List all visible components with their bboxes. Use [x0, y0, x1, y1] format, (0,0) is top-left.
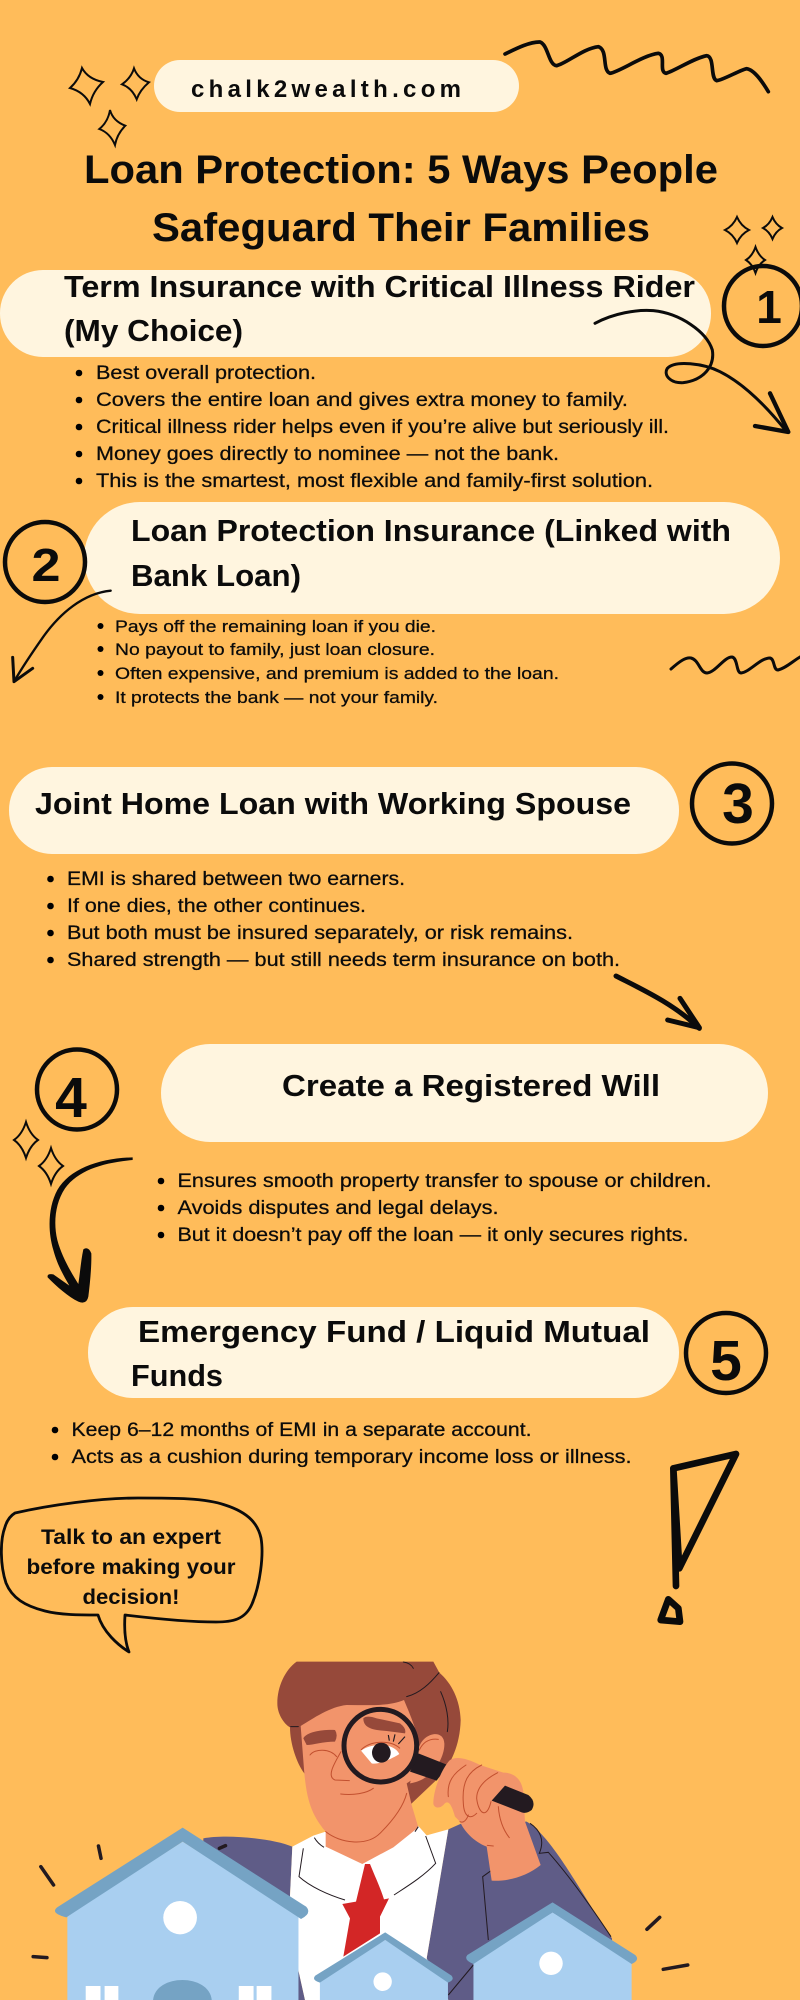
hand finger lines: [448, 1765, 509, 1846]
eyebrow right: [363, 1717, 405, 1733]
decorative squiggle top right: [505, 42, 768, 92]
number badge 5: [686, 1313, 766, 1393]
bullet list 2: No payout to family, just loan closure.: [115, 640, 435, 659]
number badge 3: [692, 764, 772, 844]
heading pill 5: [88, 1307, 679, 1398]
magnifying glass handle: [410, 1753, 448, 1781]
illustration: man with magnifying glass: [203, 1662, 612, 2000]
magnifying glass lens: [344, 1709, 417, 1782]
panel: way 5 emergency fund: [52, 1307, 766, 1468]
arrow: from section 2 down left: [13, 591, 111, 682]
title: Loan Protection: 5 Ways People: [84, 148, 718, 192]
ear: [410, 1734, 444, 1783]
icon: sparkles above number 1: [725, 217, 782, 273]
eye: [361, 1734, 405, 1764]
bullet list 3: But both must be insured separately, or risk remains.: [67, 923, 573, 944]
panel: way 4 registered will: [14, 1044, 768, 1303]
heading 2: [131, 513, 731, 593]
arrow: from section 3: [616, 976, 699, 1028]
bullet list 2: Often expensive, and premium is added to the loan.: [115, 664, 559, 683]
house right: [466, 1902, 637, 2000]
callout: talk to an expert speech bubble: Talk to an expert: [41, 1526, 221, 1549]
heading 4: Create a Registered Will: [282, 1068, 660, 1103]
panel: way 1 term insurance: [0, 266, 800, 492]
number badge 2: 2: [32, 539, 60, 591]
heading 5: Funds: [131, 1358, 223, 1393]
tie: [342, 1864, 389, 1957]
heading pill 3: [9, 767, 679, 854]
arrow: looped arrow from section 1: [595, 310, 788, 432]
number badge 3: 3: [722, 772, 754, 836]
heading 2: Bank Loan): [131, 558, 301, 593]
bullet list 4: But it doesn’t pay off the loan — it only secures rights.: [178, 1225, 688, 1246]
heading 1: (My Choice): [64, 313, 243, 348]
heading pill 2: [84, 502, 780, 614]
house small: [314, 1932, 453, 2000]
closed eye, nose, mouth and jaw lines: [310, 1739, 438, 1842]
decorative squiggle right of section 2: [671, 657, 800, 673]
illustration: houses and burst dashes: [33, 1828, 688, 2000]
shirt: [289, 1826, 448, 2000]
heading pill 1: [0, 270, 711, 357]
hair lines: [291, 1662, 448, 1732]
bullet list 5: Keep 6–12 months of EMI in a separate account.: [72, 1420, 532, 1441]
arrow: thick curved arrow down: [48, 1157, 133, 1303]
number badge 4: 4: [55, 1066, 87, 1130]
eyebrow left: [303, 1730, 337, 1745]
icon: top sparkles: [70, 68, 149, 145]
bullet list 3: If one dies, the other continues.: [67, 896, 366, 917]
bullet list 2: [98, 617, 559, 707]
bullet list 4: Ensures smooth property transfer to spouse or children.: [178, 1171, 712, 1192]
heading 1: Term Insurance with Critical Illness Rider: [64, 269, 695, 304]
callout: talk to an expert speech bubble: decision!: [82, 1586, 180, 1609]
burst dashes: [33, 1846, 688, 1969]
website badge: [154, 60, 519, 112]
number badge 5: 5: [710, 1329, 742, 1393]
number badge 4: [37, 1050, 117, 1130]
bullet list 1: This is the smartest, most flexible and family-first solution.: [96, 471, 653, 492]
panel: way 3 joint home loan: [9, 764, 772, 1028]
house large: [55, 1828, 308, 2000]
number badge 1: 1: [756, 281, 782, 333]
number badge 1: [724, 266, 800, 346]
title: Safeguard Their Families: [152, 206, 650, 250]
icon: sparkles below number 4: [14, 1122, 63, 1184]
bullet list 3: [47, 869, 620, 971]
bullet list 2: It protects the bank — not your family.: [115, 688, 438, 707]
bullet list 1: [76, 363, 669, 492]
bullet list 1: Money goes directly to nominee — not the bank.: [96, 444, 559, 465]
panel: way 2 loan protection insurance: [5, 502, 780, 707]
bullet list 4: [158, 1171, 711, 1246]
bullet list 4: Avoids disputes and legal delays.: [178, 1198, 498, 1219]
magnifying glass grip: [492, 1786, 534, 1813]
heading 5: Emergency Fund / Liquid Mutual: [138, 1314, 650, 1349]
heading 3: Joint Home Loan with Working Spouse: [35, 786, 631, 821]
number badge 2: [5, 522, 85, 602]
bullet list 2: Pays off the remaining loan if you die.: [115, 617, 436, 636]
jacket: [203, 1822, 612, 2000]
heading 5: [131, 1314, 650, 1393]
hand: [433, 1758, 541, 1881]
collar and jacket lines: [299, 1823, 611, 1995]
website badge: chalk2wealth.com: [191, 76, 461, 103]
heading 2: Loan Protection Insurance (Linked with: [131, 513, 731, 548]
bullet list 1: Critical illness rider helps even if you’re alive but seriously ill.: [96, 417, 669, 438]
bullet list 1: Covers the entire loan and gives extra money to family.: [96, 390, 628, 411]
icon: hand-drawn exclamation mark: [661, 1454, 736, 1622]
bullet list 5: [52, 1420, 631, 1468]
face and neck: [301, 1700, 419, 1864]
heading pill 4: [161, 1044, 768, 1142]
bullet list 1: Best overall protection.: [96, 363, 316, 384]
hair: [277, 1662, 461, 1805]
bullet list 3: Shared strength — but still needs term insurance on both.: [67, 950, 620, 971]
callout: talk to an expert speech bubble: before making your: [26, 1556, 236, 1579]
bullet list 5: Acts as a cushion during temporary income loss or illness.: [72, 1447, 632, 1468]
bullet list 3: EMI is shared between two earners.: [67, 869, 405, 890]
heading 1: [64, 269, 695, 348]
callout: talk to an expert speech bubble: [1, 1498, 262, 1652]
title: [84, 148, 718, 250]
